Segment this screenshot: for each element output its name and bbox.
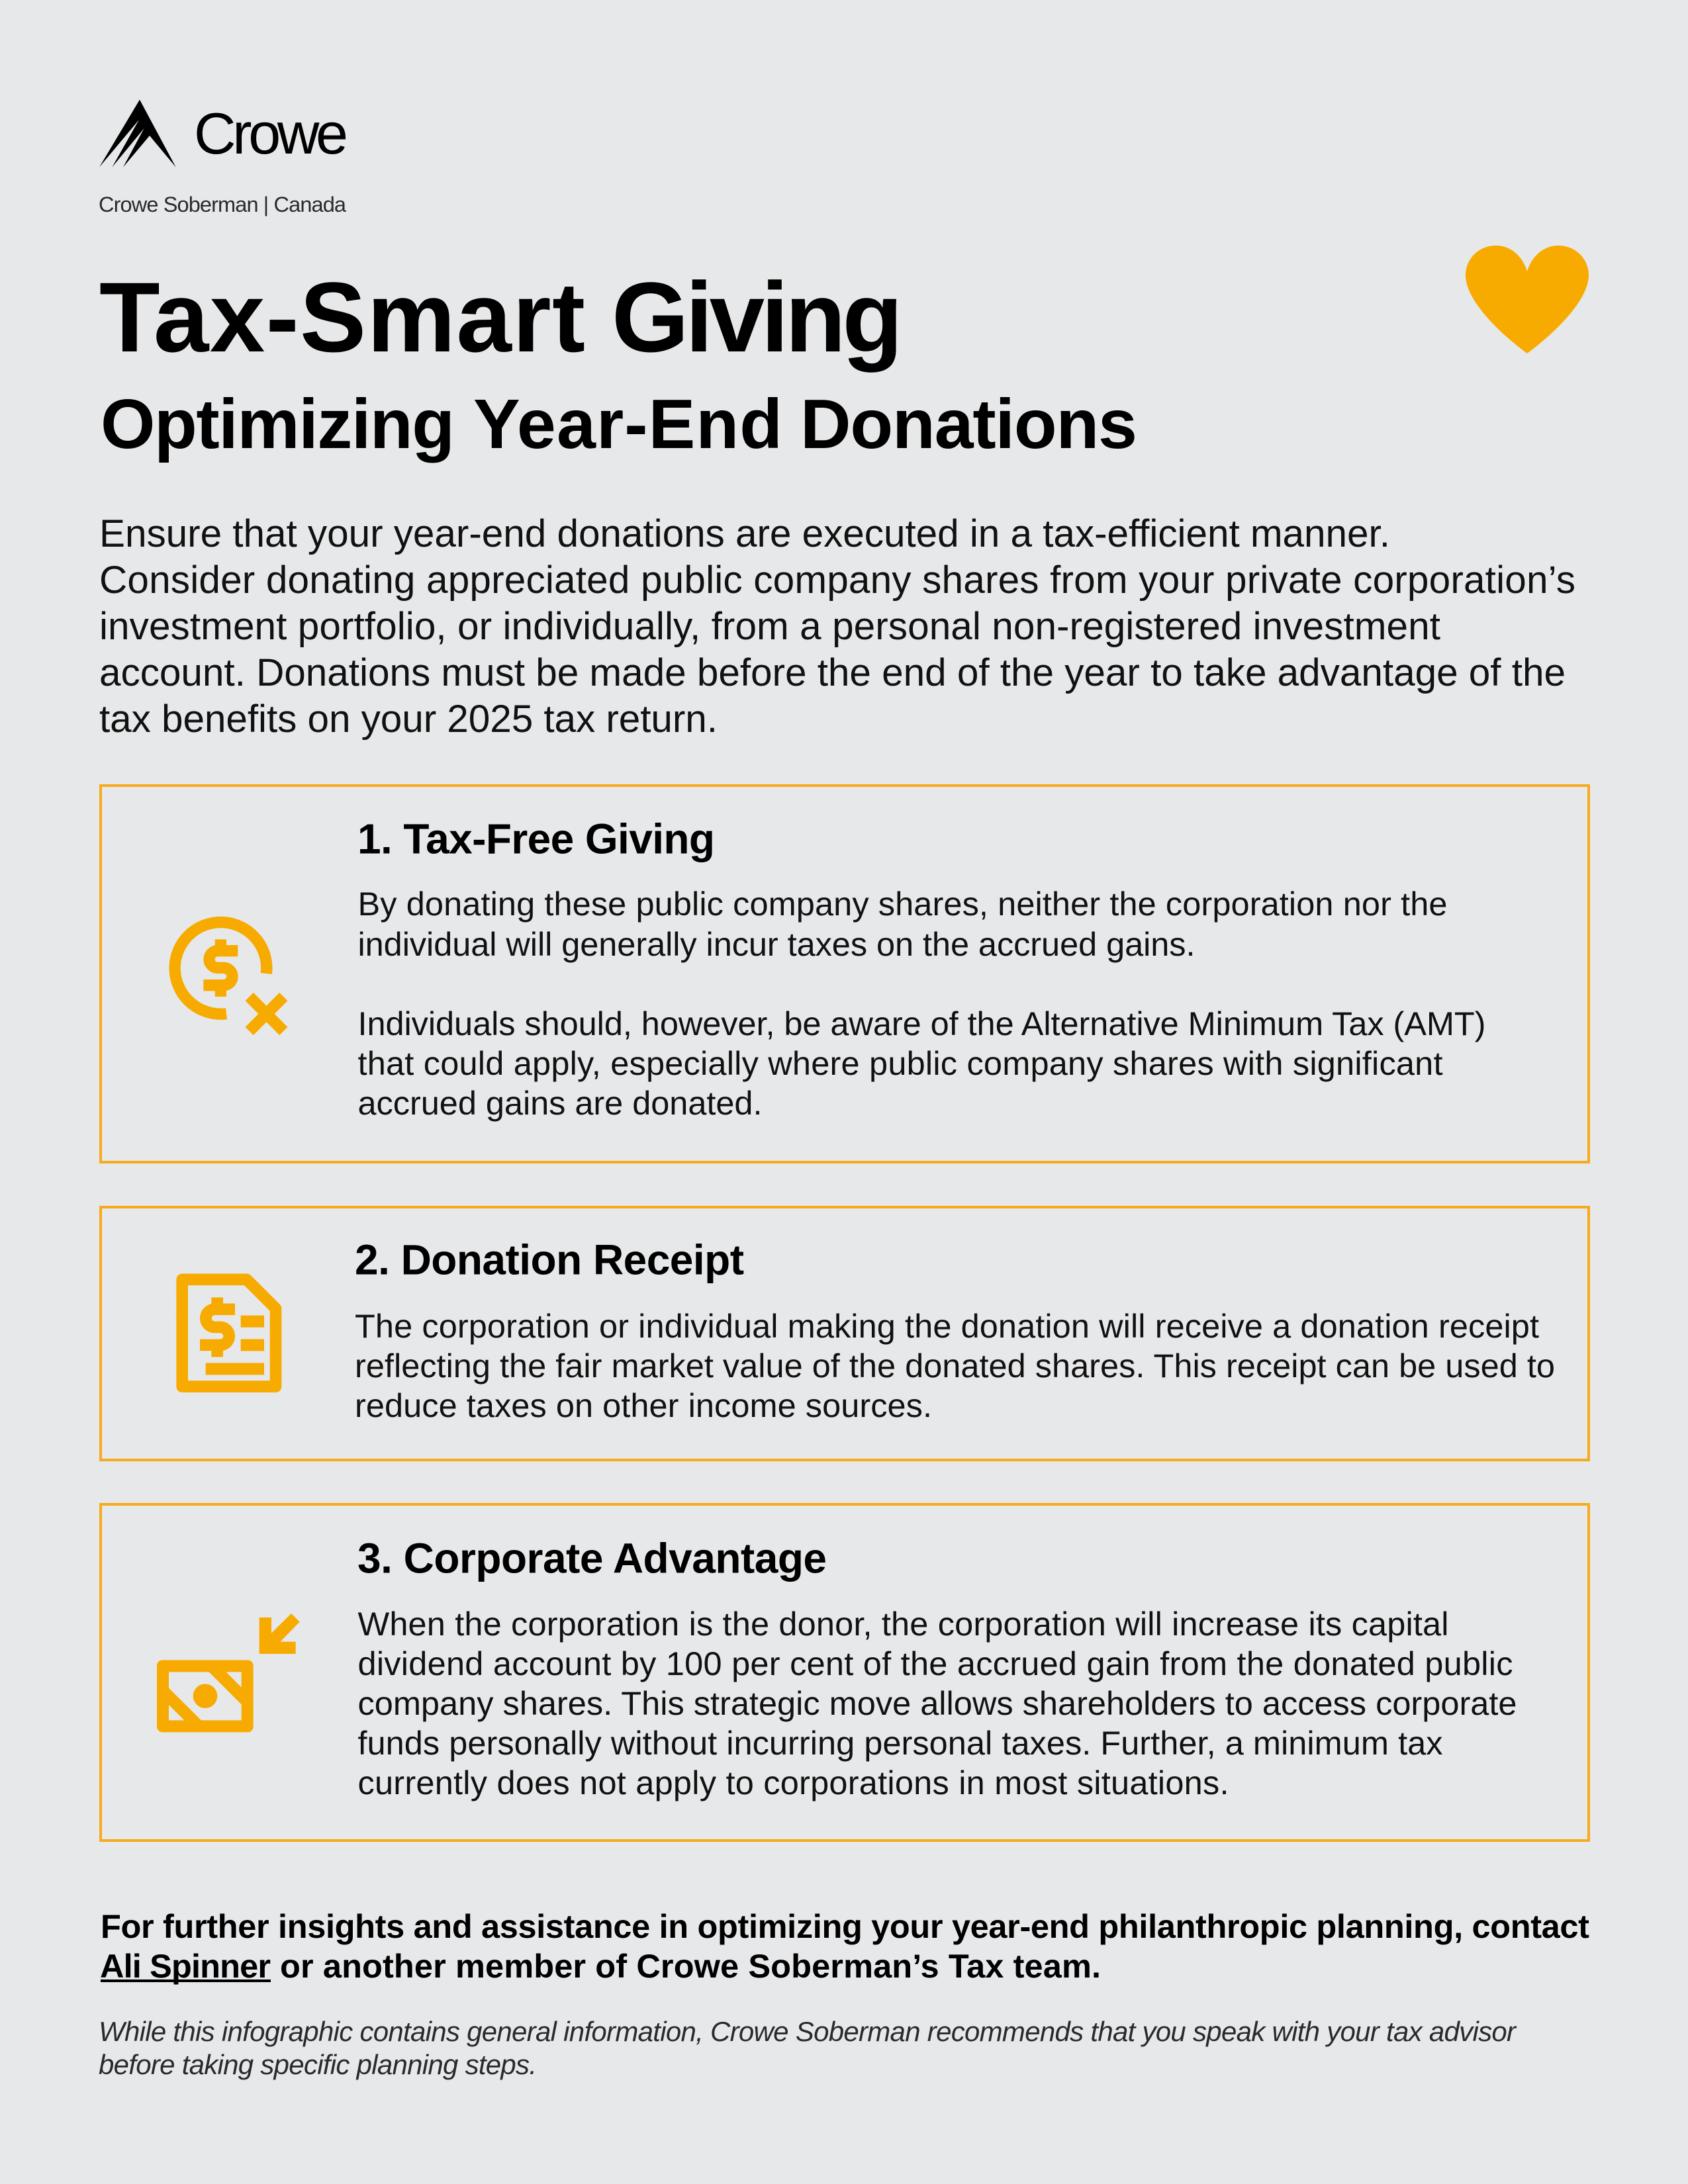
body text: [355, 1307, 1555, 1424]
body text: funds personally without incurring personal taxes. Further, a minimum tax: [357, 1724, 1443, 1762]
body text: company shares. This strategic move allows shareholders to access corporate: [357, 1684, 1517, 1722]
body text: [357, 1605, 1517, 1801]
logo sub-line: Crowe Soberman | Canada: [99, 193, 347, 216]
icon: dollar receipt document: [182, 1279, 275, 1387]
body text: individual will generally incur taxes on the accrued gains.: [357, 925, 1196, 963]
call to action: For further insights and assistance in optimizing your year-end philanthropic planning, contact: [101, 1907, 1589, 1945]
call to action: Ali Spinner: [100, 1947, 271, 1985]
panel border: [101, 1504, 1589, 1841]
disclaimer note: While this infographic contains general information, Crowe Soberman recommends that you speak with your tax advisor: [99, 2016, 1517, 2047]
subtitle: Optimizing: [101, 385, 455, 463]
intro paragraph: account. Donations must be made before the end of the year to take advantage of the: [99, 651, 1566, 694]
body text: By donating these public company shares, neither the corporation nor the: [357, 885, 1447, 923]
body text: [357, 885, 1485, 1122]
intro paragraph: Ensure that your year-end donations are executed in a tax-efficient manner.: [99, 512, 1390, 555]
intro paragraph: tax benefits on your 2025 tax return.: [99, 698, 718, 741]
call to action: [100, 1907, 1589, 1985]
title: [99, 261, 903, 373]
heading: 1. Tax-Free Giving: [357, 815, 715, 863]
intro paragraph: investment portfolio, or individually, from a personal non-registered investment: [99, 605, 1440, 648]
icon: dollar with cross: [175, 923, 283, 1031]
subtitle: Donations: [800, 385, 1137, 463]
body text: dividend account by 100 per cent of the accrued gain from the donated public: [357, 1645, 1513, 1682]
logo wordmark: Crowe: [194, 101, 348, 166]
disclaimer note: [99, 2016, 1517, 2080]
icon: Crowe peak mark: [99, 100, 176, 167]
body text: The corporation or individual making the donation will receive a donation receipt: [355, 1307, 1539, 1345]
panel: 3. Corporate Advantage: [101, 1504, 1589, 1841]
subtitle: [101, 385, 1137, 463]
panel: 1. Tax-Free Giving: [101, 786, 1589, 1162]
body text: currently does not apply to corporations in most situations.: [357, 1764, 1229, 1801]
body text: Individuals should, however, be aware of the Alternative Minimum Tax (AMT): [357, 1005, 1485, 1042]
body text: accrued gains are donated.: [357, 1084, 763, 1122]
title: Giving: [612, 261, 903, 373]
body text: reflecting the fair market value of the donated shares. This receipt can be used to: [355, 1347, 1555, 1385]
heading: 3. Corporate Advantage: [357, 1534, 827, 1582]
body text: that could apply, especially where public company shares with significant: [357, 1044, 1443, 1082]
title: Tax-Smart: [99, 261, 585, 373]
disclaimer note: before taking specific planning steps.: [99, 2049, 537, 2080]
icon: heart: [1466, 246, 1589, 353]
intro paragraph: Consider donating appreciated public company shares from your private corporation’s: [99, 559, 1575, 602]
icon: banknote with inward arrow: [157, 1614, 300, 1732]
call to action: or another member of Crowe Soberman’s Tax team.: [280, 1947, 1101, 1985]
body text: reduce taxes on other income sources.: [355, 1387, 932, 1424]
panel: 2. Donation Receipt: [101, 1207, 1589, 1460]
body text: When the corporation is the donor, the corporation will increase its capital: [357, 1605, 1448, 1643]
intro paragraph: [99, 512, 1575, 741]
heading: 2. Donation Receipt: [355, 1236, 744, 1284]
subtitle: Year-End: [473, 385, 782, 463]
panel border: [101, 786, 1589, 1162]
panel border: [101, 1207, 1589, 1460]
logo: Crowe Soberman Canada: [99, 100, 348, 216]
